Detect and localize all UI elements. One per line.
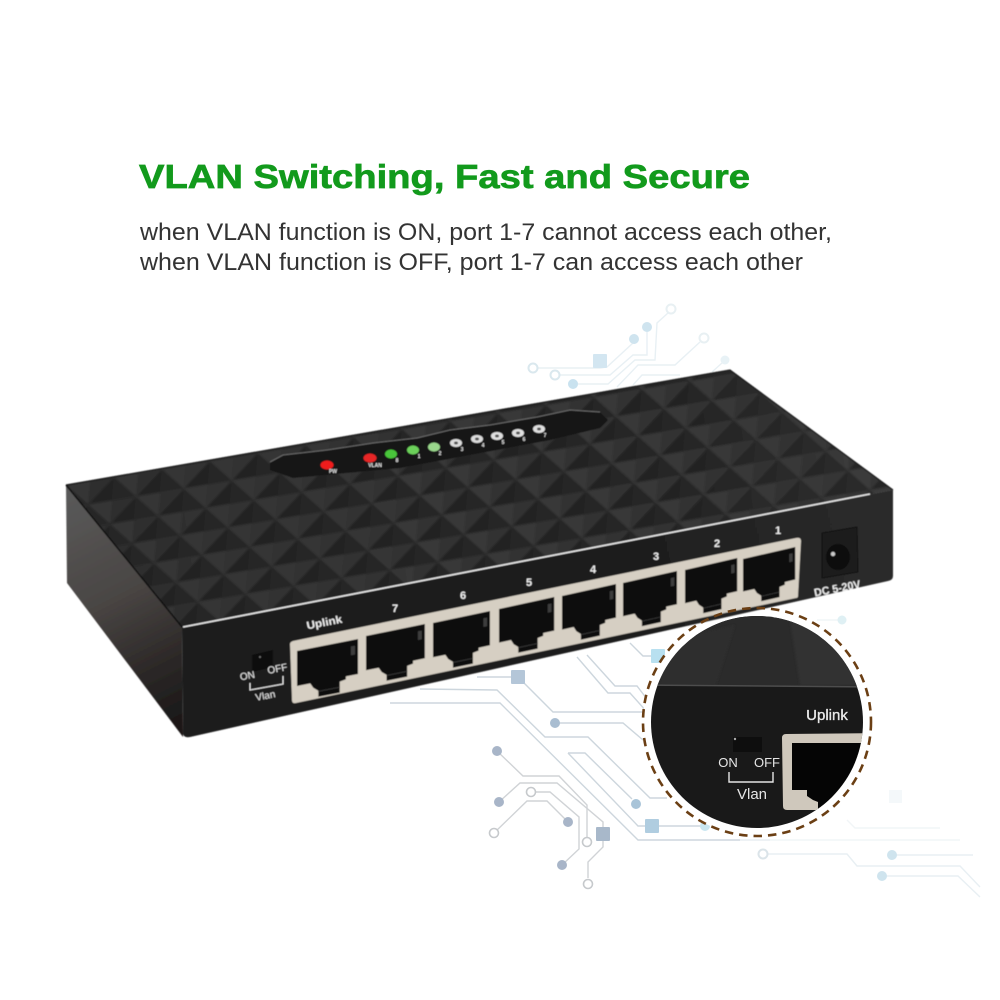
network switch device — [50, 360, 910, 737]
inset: RJ45 port — [782, 733, 862, 810]
device: top face outline — [66, 370, 893, 627]
circuit traces: bottom centre — [390, 643, 770, 888]
LED labels: PW — [329, 469, 337, 475]
port number labels: 4 — [590, 564, 597, 576]
port number labels: 3 — [653, 551, 659, 563]
inset: VLAN slide switch — [733, 737, 762, 752]
inset: switch labels: ON — [718, 755, 738, 770]
port number labels: Uplink — [306, 614, 344, 632]
LED labels: 5 — [502, 440, 505, 446]
device: top face with diamond pattern — [66, 370, 892, 628]
description text — [139, 219, 832, 276]
port: 3 — [623, 571, 677, 630]
VLAN switch labels: OFF — [267, 662, 288, 677]
LED labels: 7 — [544, 433, 547, 439]
VLAN switch labels — [239, 662, 288, 704]
port number labels — [306, 525, 781, 632]
circuit traces: bottom right — [740, 616, 980, 897]
port number labels: 6 — [460, 590, 466, 602]
inset: switch labels: OFF — [754, 755, 780, 770]
port: 2 — [685, 558, 737, 618]
port: 4 — [562, 584, 616, 644]
LED labels: 3 — [461, 447, 464, 453]
VLAN switch labels: Vlan — [255, 689, 276, 704]
VLAN slide switch — [252, 650, 273, 672]
LED labels: 2 — [439, 451, 442, 457]
description text: when VLAN function is OFF, port 1-7 can access each other — [139, 249, 803, 276]
port: Uplink — [297, 639, 358, 701]
port: 5 — [499, 597, 554, 657]
LED labels: VLAN — [368, 463, 382, 469]
circuit traces: top right — [528, 304, 730, 389]
inset: switch labels: Vlan — [737, 786, 767, 803]
device: front edge highlight — [183, 494, 870, 627]
LED labels: 6 — [523, 437, 526, 443]
DC power jack — [822, 527, 858, 578]
device: front face — [182, 490, 893, 737]
port: 7 — [366, 624, 425, 685]
DC voltage label: DC 5-20V — [813, 579, 862, 599]
LED window — [270, 410, 608, 478]
LED labels: 1 — [418, 454, 421, 460]
port: 6 — [433, 611, 490, 672]
inset: switch labels — [718, 755, 780, 803]
port panel — [290, 538, 801, 703]
title: VLAN Switching, Fast and Secure — [139, 158, 750, 195]
port number labels: 2 — [714, 538, 720, 550]
LED labels: 8 — [396, 458, 399, 464]
inset: Uplink label: Uplink — [806, 707, 848, 724]
device: left side face — [66, 485, 183, 737]
LED labels: 4 — [482, 443, 485, 449]
port number labels: 1 — [775, 525, 781, 537]
description text: when VLAN function is ON, port 1-7 cannot access each other, — [139, 219, 832, 246]
VLAN switch labels: ON — [239, 670, 256, 683]
inset dashed border — [643, 608, 871, 836]
port number labels: 7 — [392, 603, 398, 615]
inset magnifier: VLAN switch detail — [644, 616, 863, 828]
LED indicators — [320, 425, 545, 470]
port number labels: 5 — [526, 577, 532, 589]
LED labels — [329, 433, 547, 475]
port: 1 — [743, 547, 795, 606]
